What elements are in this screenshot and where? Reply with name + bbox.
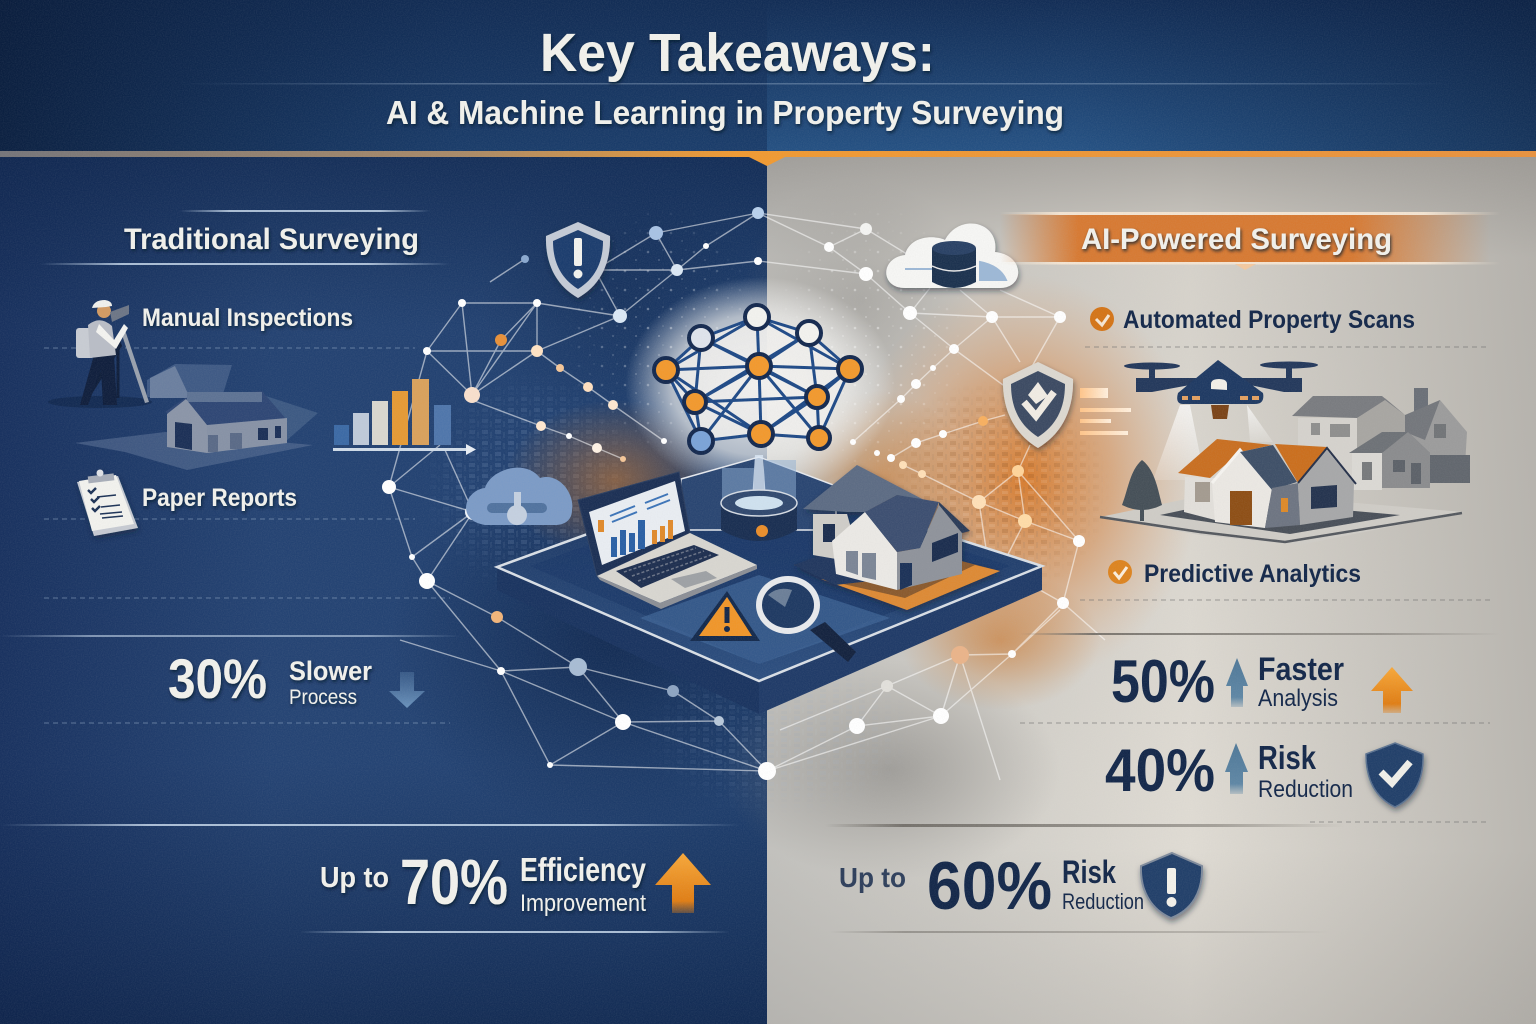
stat: 30% slower process: Process bbox=[289, 686, 357, 709]
stat: 40% risk reduction: 40% bbox=[1105, 737, 1215, 804]
icon: shield warning (left) bbox=[546, 222, 610, 298]
icon: check badge predictive analytics bbox=[1108, 560, 1132, 584]
stat: 50% faster analysis: Analysis bbox=[1258, 685, 1338, 712]
stat: up to 60% risk reduction: 60% bbox=[927, 848, 1052, 924]
stat: 50% faster analysis bbox=[1020, 633, 1500, 715]
icon: shield check stat bbox=[1366, 743, 1423, 807]
illustration: scanned house bbox=[1100, 439, 1463, 545]
illustration: scan beams bbox=[1153, 405, 1273, 480]
center orange and white glow bbox=[516, 213, 954, 542]
illustration: background houses bbox=[1292, 388, 1470, 490]
label: paper reports: Paper Reports bbox=[142, 484, 297, 512]
isometric platform bbox=[497, 455, 1042, 714]
title: Key Takeaways: bbox=[540, 23, 935, 83]
heading: AI-powered surveying: AI-Powered Surveying bbox=[1081, 223, 1392, 256]
magnifying glass bbox=[756, 576, 856, 662]
icon: shield warning stat bbox=[1141, 853, 1202, 918]
stat: up to 70% efficiency improvement bbox=[0, 824, 740, 933]
background: AI-powered side bbox=[720, 153, 1536, 1024]
stat: up to 60% risk reduction bbox=[825, 824, 1345, 933]
panel: AI-powered surveying bbox=[825, 212, 1500, 933]
icon: orange up arrow bbox=[655, 853, 711, 913]
platform base bbox=[497, 470, 1042, 714]
stat: up to 70% efficiency improvement: Efficiency bbox=[520, 851, 647, 888]
orange header rule with notch bbox=[0, 151, 1536, 166]
icon: blue up arrow 40% bbox=[1225, 743, 1248, 794]
icon: shield check (right) bbox=[1003, 362, 1073, 448]
back wall bbox=[681, 457, 836, 530]
icon: orange up arrow 50% bbox=[1371, 667, 1413, 713]
subtitle: AI & Machine Learning in Property Surveying bbox=[386, 94, 1064, 131]
laptop bbox=[578, 472, 757, 609]
stat: 30% slower process bbox=[0, 635, 460, 710]
icon: cloud (left) bbox=[466, 468, 572, 525]
stat: up to 70% efficiency improvement: 70% bbox=[400, 846, 508, 918]
header band bbox=[0, 0, 1536, 153]
bar chart bbox=[333, 379, 476, 455]
house on platform bbox=[794, 465, 1000, 610]
stat: up to 60% risk reduction: Risk bbox=[1062, 854, 1116, 890]
icon: drone bbox=[1124, 360, 1318, 419]
stat: up to 60% risk reduction: Up to bbox=[839, 862, 906, 893]
label: manual inspections: Manual Inspections bbox=[142, 304, 353, 332]
stat: 30% slower process: Slower bbox=[289, 656, 372, 686]
stat: 30% slower process: 30% bbox=[168, 647, 267, 710]
stat: 40% risk reduction: Risk bbox=[1258, 739, 1317, 776]
icon: down arrow bbox=[389, 672, 425, 708]
label: automated property scans: Automated Property Scans bbox=[1123, 306, 1415, 334]
data columns texture bbox=[443, 390, 1084, 794]
stat: 50% faster analysis: 50% bbox=[1111, 648, 1215, 715]
network: connecting lines bbox=[389, 213, 1105, 780]
heading: traditional surveying: Traditional Surveying bbox=[124, 223, 419, 256]
stat: 50% faster analysis: Faster bbox=[1258, 651, 1344, 687]
stat: 40% risk reduction bbox=[1105, 737, 1353, 804]
glowing hub bbox=[721, 455, 797, 541]
dashed row dividers right bbox=[1020, 347, 1490, 822]
stat: up to 60% risk reduction: Reduction bbox=[1062, 889, 1144, 914]
warning triangle bbox=[690, 591, 760, 641]
network: nodes bbox=[382, 207, 1085, 780]
central neural network bbox=[654, 305, 862, 453]
panel: traditional surveying bbox=[0, 210, 740, 933]
icon: traditional houses bbox=[75, 364, 318, 470]
icon: surveyor with tripod bbox=[48, 300, 152, 408]
dashed row dividers bbox=[44, 348, 450, 723]
icon: blue up arrow bbox=[1226, 658, 1248, 707]
speed lines bbox=[1080, 388, 1131, 435]
icon: tree bbox=[1122, 460, 1162, 521]
background: traditional side bbox=[0, 153, 830, 1024]
label: predictive analytics: Predictive Analytics bbox=[1144, 560, 1361, 588]
stat: up to 70% efficiency improvement: Up to bbox=[320, 862, 389, 894]
icon: check badge automated scans bbox=[1090, 307, 1114, 331]
stat: 40% risk reduction: Reduction bbox=[1258, 776, 1353, 803]
stat: up to 70% efficiency improvement: Improvement bbox=[520, 890, 646, 917]
icon: cloud with database bbox=[886, 223, 1018, 288]
heading: AI-powered surveying bbox=[1000, 212, 1500, 270]
icon: clipboard bbox=[77, 470, 138, 536]
